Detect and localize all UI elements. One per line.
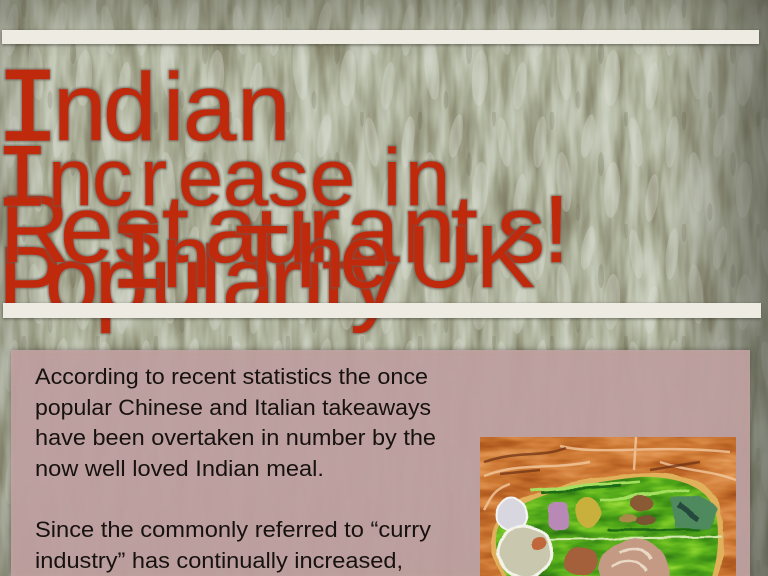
text block: intro paragraph: have been overtaken in number by the: [35, 425, 436, 450]
text block: second paragraph: [35, 517, 432, 573]
title line: Restaurants!: Restaurants!: [0, 176, 570, 283]
naan bread: [599, 538, 670, 576]
text block: second paragraph: Since the commonly referred to “curry: [35, 517, 432, 542]
leaf edge: [492, 472, 724, 576]
bottom cream bar: [3, 303, 761, 318]
text block: second paragraph: industry” has continually increased,: [35, 548, 403, 573]
leaf surface: [496, 476, 718, 576]
plate: white bowl: [496, 499, 528, 531]
title line: Increase in: Increase in: [0, 133, 450, 232]
bowl: pink food: [548, 502, 569, 529]
image: painterly Indian meal on a banana leaf: [480, 437, 736, 576]
text block: intro paragraph: popular Chinese and Italian takeaways: [35, 395, 431, 420]
brown food: [629, 496, 653, 510]
text block: intro paragraph: now well loved Indian meal.: [35, 456, 324, 481]
title line: Popularity: Popularity: [0, 227, 398, 334]
plate: large rice plate: [499, 526, 551, 576]
bowl: yellow food: [576, 497, 600, 529]
dark leaf vegetable: [670, 495, 718, 530]
top cream bar: [2, 30, 759, 44]
text block: intro paragraph: According to recent statistics the once: [35, 364, 428, 389]
curry portion: [564, 549, 598, 575]
panel: body content: [11, 350, 750, 576]
title: overlapping red heading lines: [0, 52, 570, 334]
text block: intro paragraph: [35, 364, 436, 481]
title line: In The UK: In The UK: [110, 207, 535, 316]
title line: Indian: Indian: [0, 52, 290, 172]
